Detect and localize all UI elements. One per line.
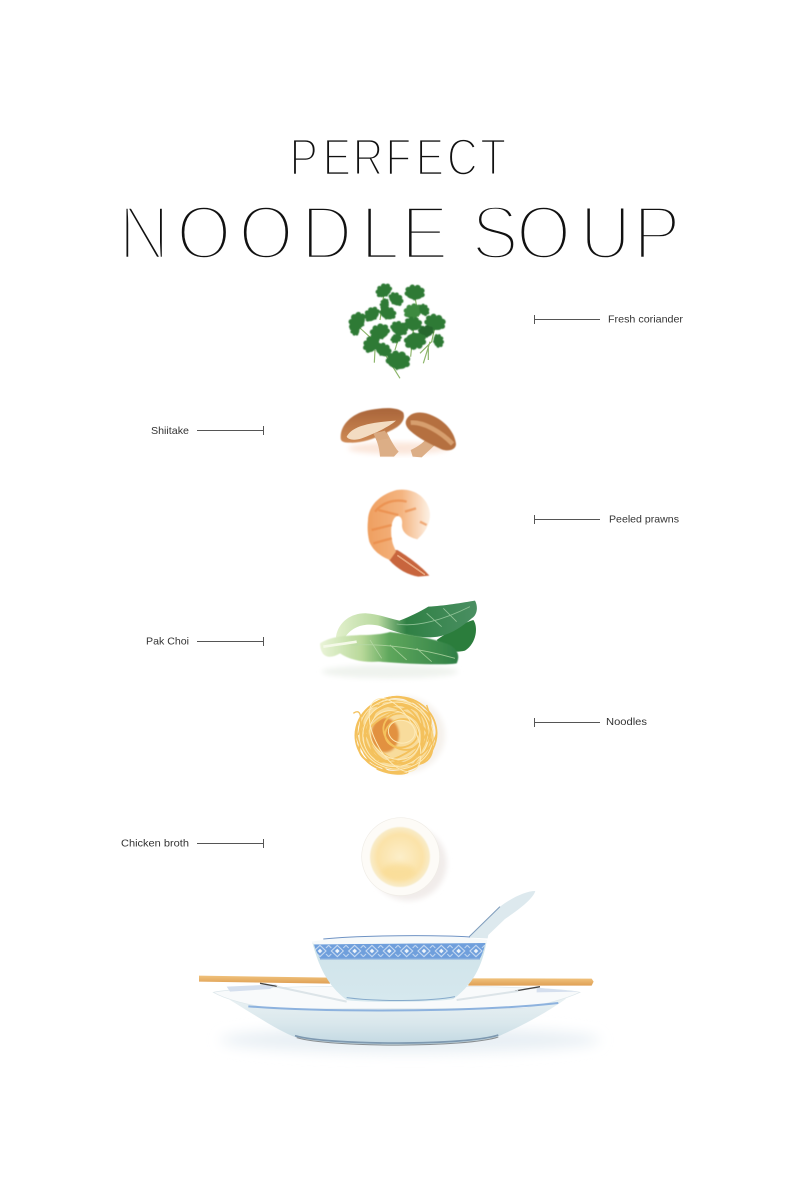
chopsticks — [199, 976, 330, 984]
bowl body — [312, 941, 487, 1002]
label: Chicken broth — [121, 838, 264, 850]
label: Pak Choi — [146, 636, 264, 648]
title line: NOODLE SOUP: NOODLE SOUP — [119, 191, 680, 276]
icon: pak choi — [320, 601, 477, 678]
icon: coriander — [345, 281, 448, 378]
icon: chicken broth dish — [362, 818, 447, 901]
icon: shiitake mushrooms — [341, 408, 456, 457]
label: Shiitake — [151, 426, 264, 437]
right cap — [406, 412, 456, 450]
label: Chicken broth: Chicken broth — [121, 838, 189, 850]
title line: PERFECT: PERFECT — [289, 129, 506, 187]
lower leaf and stem — [320, 632, 458, 664]
left cap — [341, 408, 404, 443]
left stem — [373, 431, 399, 457]
plate underside — [230, 998, 567, 1045]
label: Shiitake: Shiitake — [151, 426, 189, 437]
tail — [389, 550, 429, 577]
label: Fresh coriander: Fresh coriander — [608, 314, 684, 326]
icon: prawn — [368, 490, 430, 577]
icon: noodle nest — [346, 683, 447, 784]
reflection — [322, 665, 458, 678]
right stem — [411, 435, 435, 457]
label: Fresh coriander — [534, 314, 684, 326]
label: Peeled prawns: Peeled prawns — [609, 514, 679, 526]
label: Peeled prawns — [534, 514, 679, 526]
upper leaf and stem — [336, 601, 477, 640]
plate rim — [213, 986, 580, 1009]
body — [368, 490, 430, 560]
back dark leaf — [437, 620, 476, 652]
plate shadow — [220, 1027, 600, 1053]
bowl rim — [312, 936, 487, 944]
bowl pattern band — [314, 943, 485, 958]
spoon — [468, 891, 535, 938]
icon: bowl, spoon, chopsticks and plate — [199, 891, 600, 1053]
label: Pak Choi: Pak Choi — [146, 636, 189, 648]
label: Noodles: Noodles — [606, 717, 647, 728]
label: Noodles — [534, 717, 647, 728]
title — [119, 129, 680, 276]
